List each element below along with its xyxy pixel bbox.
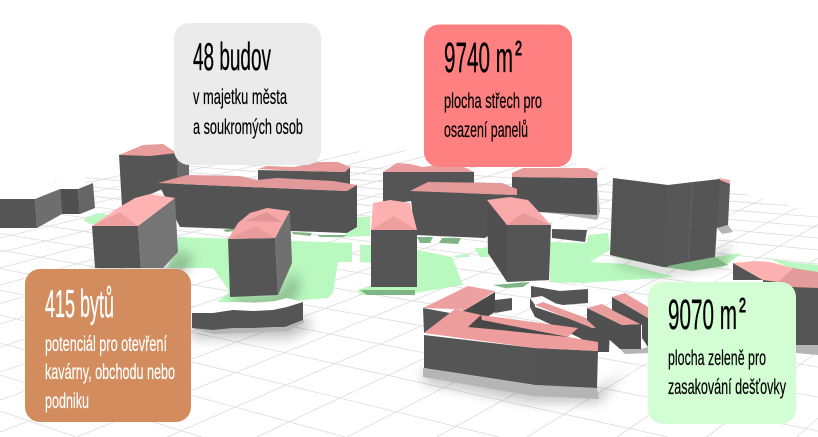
panel: roof area (424, 24, 572, 167)
building: middle long block (410, 182, 517, 238)
building: back middle (383, 163, 474, 205)
heading: 9740 m2: 9740 m (444, 34, 513, 82)
diagonal wing 2 (587, 304, 641, 349)
heading: 9070 m2 (668, 291, 746, 339)
building: right edge (733, 261, 818, 345)
building: central right gable (487, 197, 551, 282)
panel: greenery area (648, 282, 796, 424)
white roof small blocks (530, 285, 588, 317)
building: front left (92, 194, 178, 268)
building: left white roof (0, 183, 95, 228)
panel: buildings count (174, 23, 321, 165)
text: roof panels: osazení panelů (444, 118, 528, 142)
text: ownership: v majetku města (193, 85, 287, 109)
text: business potential: kavárny, obchodu nebo (45, 360, 175, 384)
text: business potential (45, 332, 175, 413)
text: roof panels: plocha střech pro (444, 89, 542, 113)
text: roof panels (444, 89, 542, 142)
text: ownership (193, 85, 303, 139)
building: long block (158, 175, 357, 233)
building: behind tall block (697, 174, 730, 228)
heading: 9070 m2: 2 (739, 295, 746, 317)
diagonal wing 1 (535, 302, 610, 352)
building: bottom white terrace (192, 298, 303, 330)
building: back left (119, 144, 189, 206)
shadows on ground (92, 178, 818, 402)
panel: flats (25, 269, 191, 422)
building: back centre row (258, 162, 350, 190)
text: business potential: podniku (45, 389, 89, 413)
rear wing (423, 286, 512, 333)
text: rainwater (668, 346, 786, 399)
text: ownership: a soukromých osob (193, 115, 303, 139)
building: small white roof (552, 219, 588, 242)
building: front centre (228, 208, 292, 297)
building cluster: bottom (423, 285, 648, 388)
green areas (83, 213, 818, 302)
building: tall white roof (610, 170, 720, 267)
building: back right (512, 168, 598, 215)
building: tall central gable (371, 200, 417, 287)
heading: 9740 m2 (444, 34, 522, 82)
heading: 9740 m2: 2 (515, 38, 522, 60)
panel: buildings count: 48 budov (193, 36, 271, 79)
heading: 9070 m2: 9070 m (668, 291, 737, 339)
diagonal wing 3 (612, 293, 648, 347)
text: business potential: potenciál pro otevření (45, 332, 167, 356)
panel: flats: 415 bytů (45, 283, 114, 326)
main block faces (424, 309, 598, 388)
ground grid (0, 150, 818, 437)
